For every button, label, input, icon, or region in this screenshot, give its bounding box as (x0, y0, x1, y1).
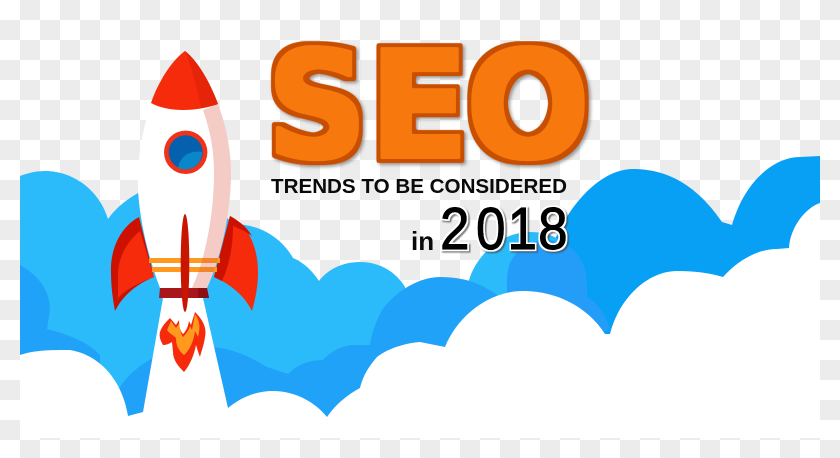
title: SEO: S (267, 20, 367, 192)
subtitle: TRENDS TO BE CONSIDERED (271, 175, 567, 198)
rocket nose cone (151, 51, 218, 110)
cloud: front white (20, 203, 820, 438)
cloud: mid blue left (20, 265, 100, 364)
rocket stripes (149, 258, 220, 272)
clouds (20, 156, 820, 438)
cloud: mid blue centre (119, 277, 497, 417)
rocket body (138, 104, 231, 288)
rocket body shade (192, 104, 231, 288)
text: in: in (411, 226, 434, 256)
rocket window (164, 131, 207, 174)
rocket base ring (159, 288, 209, 298)
title: SEO: O (466, 20, 590, 192)
rocket flame (160, 312, 206, 372)
rocket centre fin (181, 214, 189, 312)
cloud: light bump behind year (468, 232, 558, 296)
rocket right fin (214, 216, 258, 311)
cloud: back left light blue (20, 171, 420, 400)
rocket left fin (111, 217, 154, 311)
year: 2018: 2018 (440, 195, 568, 262)
rocket (111, 51, 258, 372)
title: SEO (267, 20, 590, 192)
cloud: mid bump behind year (507, 240, 610, 340)
cloud: back right bright blue (556, 156, 820, 334)
title: SEO: E (369, 20, 469, 192)
